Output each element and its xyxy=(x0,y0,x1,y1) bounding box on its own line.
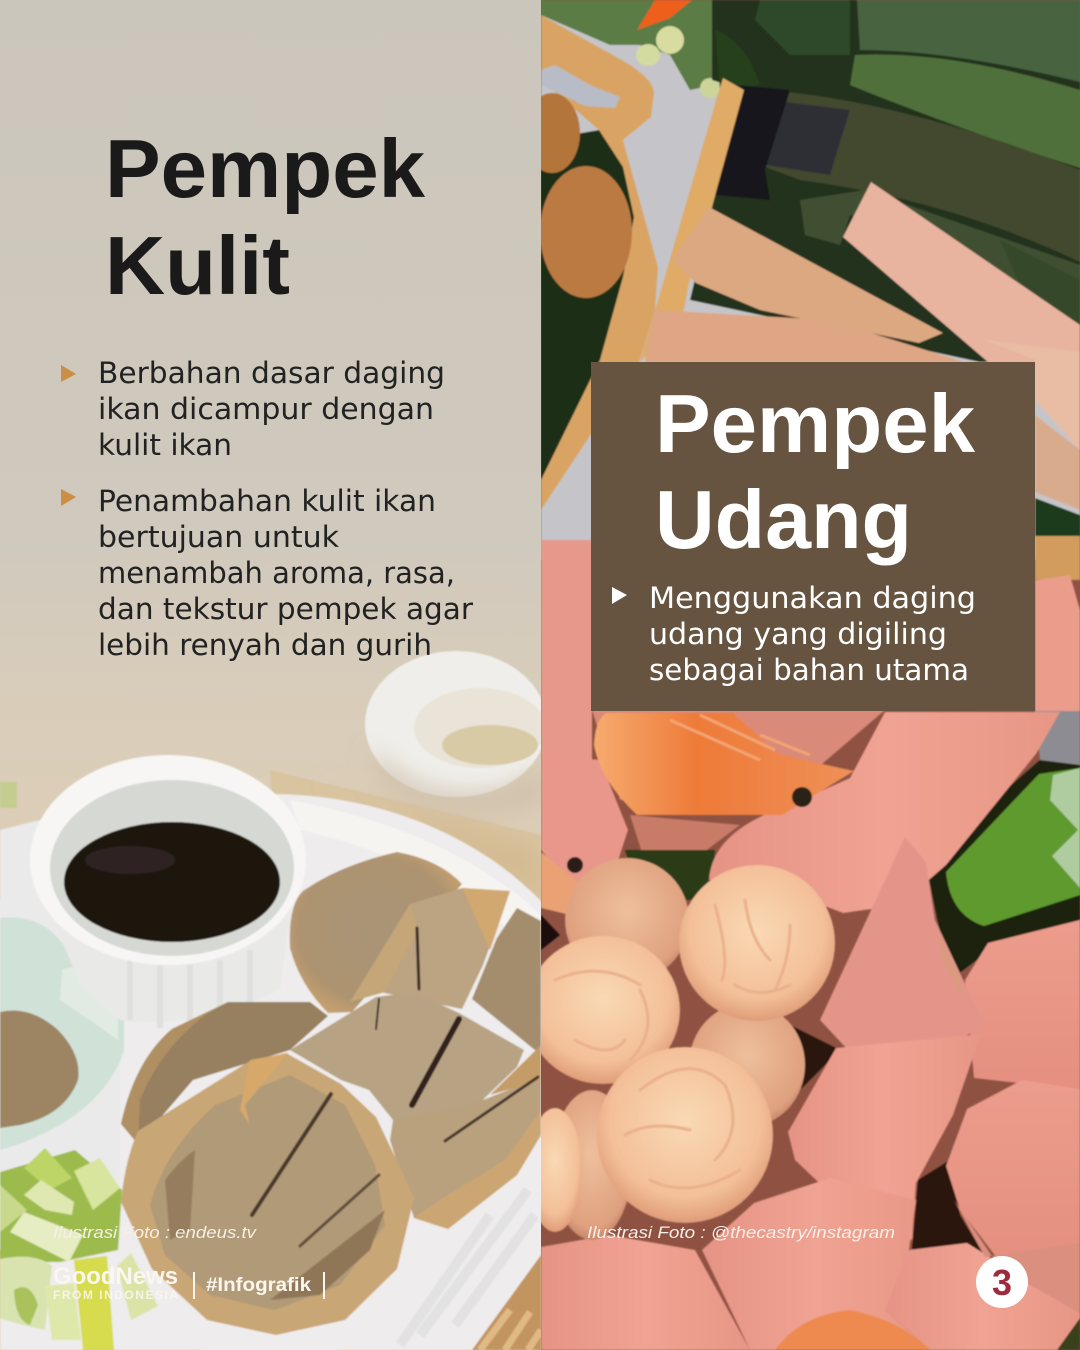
bamboo mat slats in corner xyxy=(480,1310,541,1350)
bullet text 2: lebih renyah dan gurih xyxy=(98,628,432,662)
pempek back top xyxy=(290,852,462,1013)
dark background behind cucumber xyxy=(925,760,1080,980)
grilled leaf rolls xyxy=(706,0,1080,330)
shrimp xyxy=(541,713,854,915)
bullet text xyxy=(612,581,976,687)
photo credit right: Ilustrasi Foto : @thecastry/instagram xyxy=(587,1224,895,1242)
heading: Pempek Udang: Pempek xyxy=(655,377,976,470)
small white dish xyxy=(365,651,547,811)
bullet text 1: ikan dicampur dengan xyxy=(98,392,434,426)
pempek back right edge xyxy=(472,908,541,1055)
bullet text 2: dan tekstur pempek agar xyxy=(98,592,473,626)
pempek back middle xyxy=(383,888,490,1010)
photo: pempek lenjer and banana leaf xyxy=(524,0,1080,580)
gap leaf xyxy=(625,850,715,900)
icon: bullet arrow xyxy=(61,489,76,506)
heading: Pempek Udang xyxy=(655,377,976,566)
dark leaf base xyxy=(690,0,1080,362)
herbs and flower xyxy=(541,0,720,98)
pink top pieces xyxy=(541,540,1080,885)
sauce ramekin xyxy=(30,755,306,1028)
bullet text 2: bertujuan untuk xyxy=(98,520,339,554)
cucumber xyxy=(946,768,1080,926)
green leaf in tray xyxy=(541,130,634,480)
page number badge xyxy=(976,1256,1028,1308)
green dish xyxy=(0,917,124,1150)
pempek middle xyxy=(290,992,524,1120)
cucumber pieces xyxy=(0,1148,158,1350)
heading: Pempek Kulit: Pempek xyxy=(105,122,426,215)
fried balls xyxy=(541,92,632,300)
ground spice xyxy=(0,1010,79,1128)
pempek front xyxy=(121,1053,414,1335)
heading: Pempek Kulit xyxy=(110,137,425,295)
logo: GoodNews from Indonesia: FROM INDONESIA xyxy=(53,1288,178,1302)
dark corner xyxy=(1057,1318,1080,1350)
panel: pempek kulit xyxy=(0,137,541,1350)
pempek left xyxy=(138,1001,328,1132)
bullet text 1: Berbahan dasar daging xyxy=(98,356,445,390)
tag: Infografik xyxy=(193,1272,325,1299)
lenjer rolls xyxy=(645,182,1080,510)
photo: plate of pempek kulit xyxy=(0,650,541,1350)
big sausage xyxy=(709,712,1060,913)
gray table corner xyxy=(1034,710,1080,766)
bullet text: sebagai bahan utama xyxy=(649,653,969,687)
bullet text 2 xyxy=(61,484,473,662)
triangular pempek xyxy=(541,837,1080,1350)
dark gaps xyxy=(541,915,985,1257)
bullet text 2: menambah aroma, rasa, xyxy=(98,556,455,590)
logo: GoodNews from Indonesia xyxy=(54,1266,178,1299)
photo credit left: Ilustrasi Foto : endeus.tv xyxy=(53,1224,258,1242)
pempek cuts xyxy=(252,928,538,1246)
bullet text 1: kulit ikan xyxy=(98,428,232,462)
shrimp bottom xyxy=(775,1310,930,1350)
leaf scrap xyxy=(0,782,17,808)
white plate xyxy=(0,793,541,1350)
photo: pink pempek udang xyxy=(526,540,1080,1350)
textured fish balls xyxy=(526,858,835,1240)
bullet text 2: Penambahan kulit ikan xyxy=(98,484,436,518)
pempek right lower xyxy=(390,1077,541,1229)
page number badge: 3 xyxy=(992,1262,1012,1303)
heading: Pempek Udang: Udang xyxy=(655,473,912,566)
icon: bullet arrow xyxy=(612,587,627,604)
bullet text: udang yang digiling xyxy=(649,617,947,651)
bullet text: Menggunakan daging xyxy=(649,581,976,615)
panel: pempek udang xyxy=(524,0,1080,1350)
wooden tray xyxy=(541,15,744,510)
icon: bullet arrow xyxy=(61,365,76,382)
text box: pempek udang xyxy=(591,362,1035,711)
tag: Infografik: #Infografik xyxy=(206,1275,311,1296)
heading: Pempek Kulit: Kulit xyxy=(105,219,290,312)
bullet text 1 xyxy=(61,360,442,456)
bamboo mat xyxy=(270,770,541,1350)
logo: GoodNews from Indonesia: GoodNews xyxy=(53,1263,178,1290)
